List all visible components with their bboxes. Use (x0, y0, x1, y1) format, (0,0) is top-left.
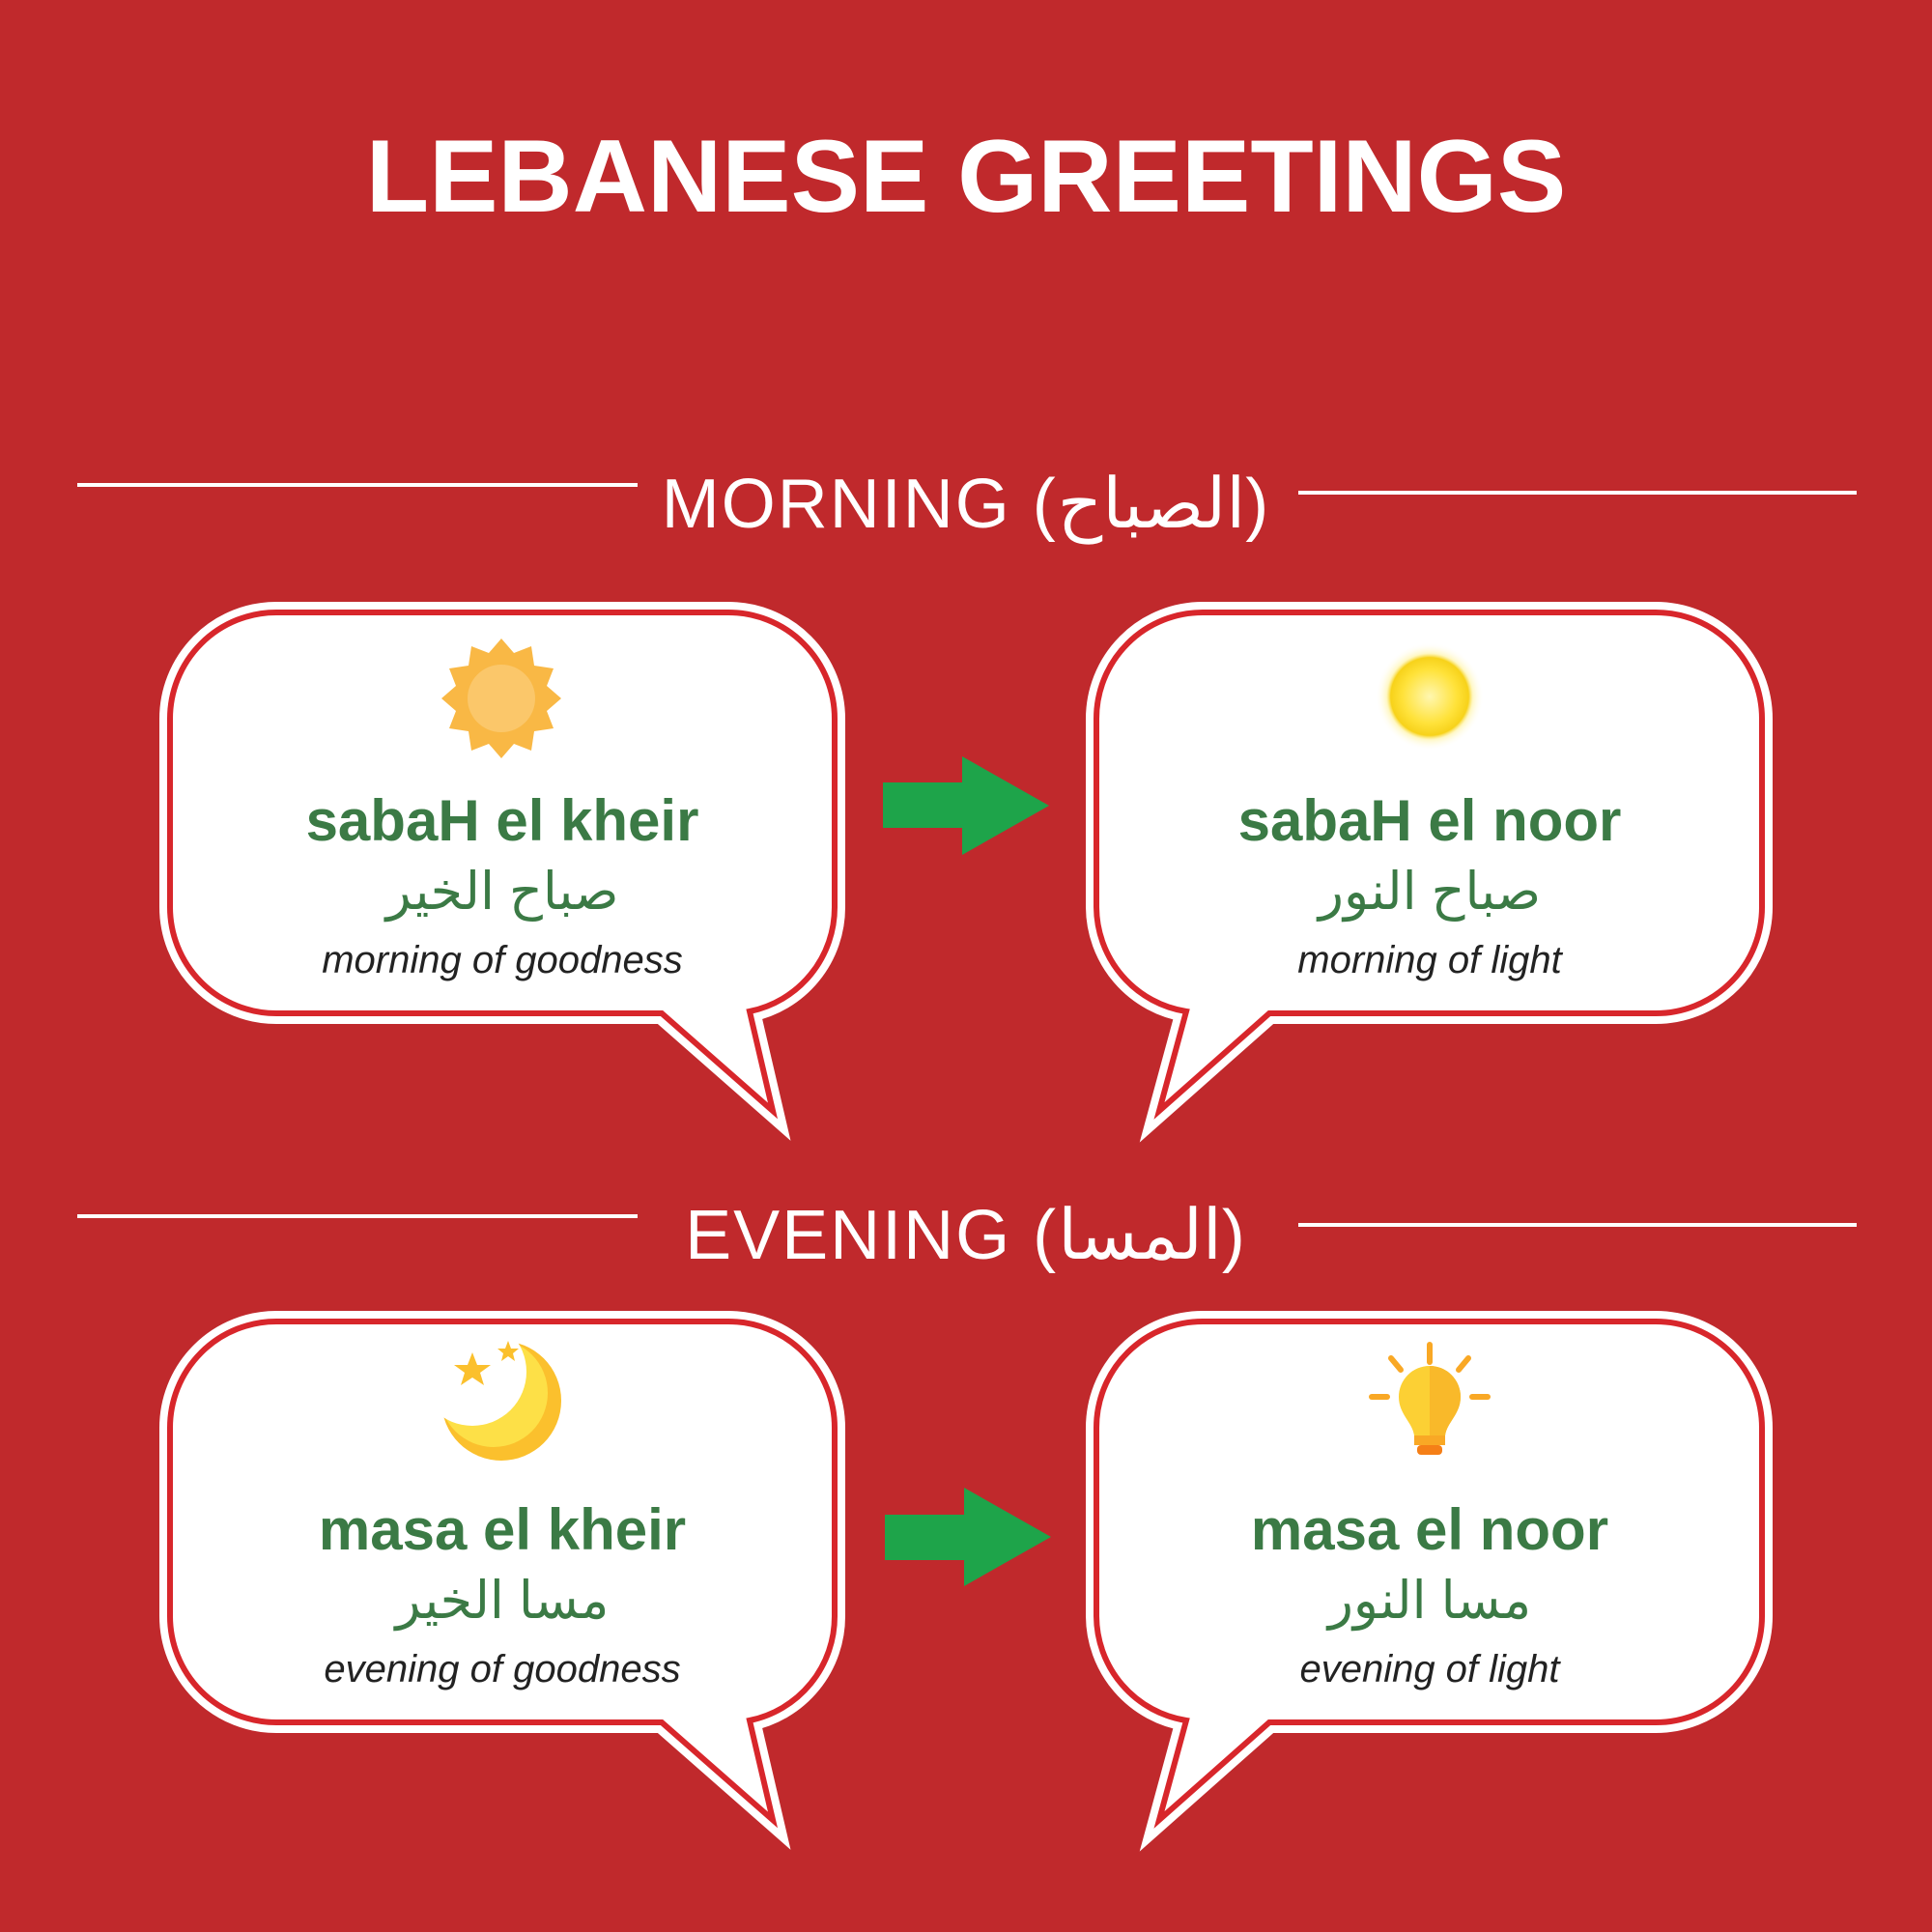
icon: sun (441, 639, 561, 758)
arrow: evening (885, 1488, 1051, 1586)
bubble: masa el noor (1096, 1321, 1762, 1820)
heading: morning: MORNING (الصباح) (662, 466, 1270, 543)
text block: masa el kheir: masa el kheir (319, 1497, 686, 1562)
icon: lightbulb (1372, 1345, 1488, 1455)
bubble: masa el kheir (170, 1321, 835, 1820)
divider: morning right (1298, 491, 1857, 495)
title: LEBANESE GREETINGS (366, 118, 1566, 234)
divider: evening left (77, 1214, 638, 1218)
icon: moon and stars (440, 1339, 561, 1461)
text block: sabaH el kheir: morning of goodness (322, 939, 683, 981)
text block: sabaH el noor: صباح النور (1319, 863, 1541, 921)
divider: evening right (1298, 1223, 1857, 1227)
text block: sabaH el noor: morning of light (1297, 939, 1562, 981)
text block: sabaH el kheir: صباح الخير (386, 863, 618, 921)
text block: masa el kheir: evening of goodness (324, 1648, 681, 1690)
text block: masa el noor: masa el noor (1251, 1497, 1608, 1562)
text block: sabaH el noor: sabaH el noor (1238, 788, 1621, 853)
heading: evening: EVENING (المسا) (685, 1197, 1247, 1274)
text block: sabaH el kheir: sabaH el kheir (306, 788, 698, 853)
divider: morning left (77, 483, 638, 487)
bubbles, arrows, icons (159, 602, 1773, 1851)
arrow: morning (883, 756, 1049, 855)
bubble: sabaH el noor (1096, 612, 1762, 1111)
text block: sabaH el kheir (306, 788, 698, 981)
text block: masa el kheir (319, 1497, 686, 1690)
icon: glowing sun (1376, 642, 1484, 751)
text block: masa el noor: مسا النور (1328, 1572, 1531, 1630)
text block: sabaH el noor (1238, 788, 1621, 981)
text block: masa el kheir: مسا الخير (396, 1572, 609, 1630)
text block: masa el noor: evening of light (1299, 1648, 1560, 1690)
text block: masa el noor (1251, 1497, 1608, 1690)
bubble: sabaH el kheir (170, 612, 835, 1111)
